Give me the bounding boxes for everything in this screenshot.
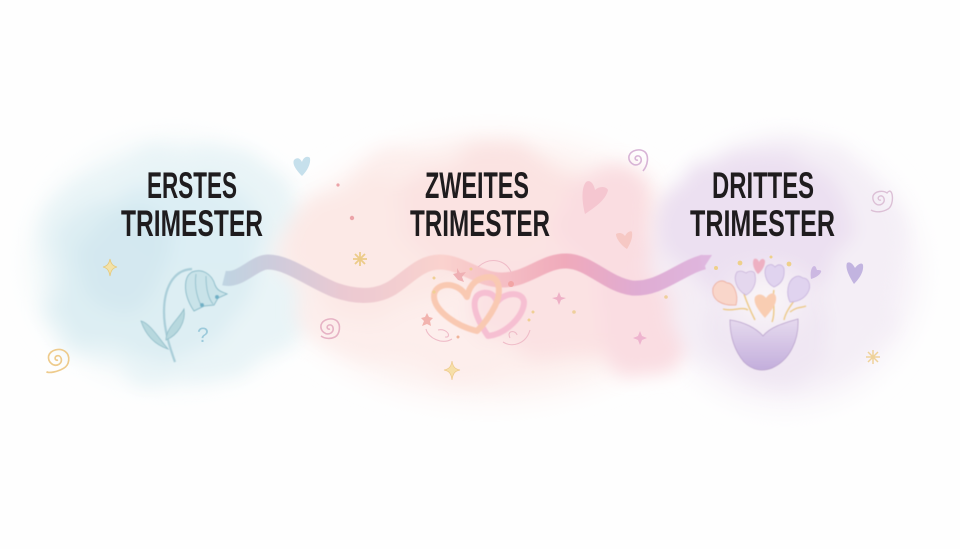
icon: bell flower with leaves <box>141 269 227 362</box>
heading: Zweites Trimester: ZWEITES <box>425 165 529 206</box>
heading: Zweites Trimester <box>410 165 550 244</box>
lilac tulip left <box>735 271 755 295</box>
heading: Erstes Trimester <box>121 165 263 244</box>
icon: pink sparkle right of hearts <box>552 292 566 305</box>
icon: gold sparkle bottom <box>444 361 460 380</box>
heading: Erstes Trimester: TRIMESTER <box>121 203 263 244</box>
pink heart <box>753 259 765 274</box>
icon: gold dots around bouquet <box>714 256 791 270</box>
icon: purple heart <box>846 262 863 284</box>
peach heart <box>755 293 776 318</box>
peach tulip <box>713 281 737 305</box>
heading: Drittes Trimester <box>690 165 835 244</box>
stems <box>723 290 806 322</box>
icon: gold spiral <box>46 349 69 372</box>
lilac tulip right <box>788 276 810 302</box>
heading: Zweites Trimester: TRIMESTER <box>410 203 550 244</box>
icon: swirls around the hearts <box>426 261 530 345</box>
heading: Drittes Trimester: DRITTES <box>712 165 814 206</box>
background wash: pale halo across the band <box>35 140 915 402</box>
icon: small lilac heart <box>811 266 821 279</box>
icon: pink sparkle <box>633 331 647 345</box>
icon: pink spiral lower left <box>321 319 339 338</box>
lilac cup <box>730 319 798 370</box>
background wash: purple <box>658 140 902 385</box>
background wash: pink <box>280 150 692 380</box>
icon: gold asterisk right <box>866 350 880 364</box>
wavy ribbon connecting the trimesters <box>224 255 712 295</box>
icon: sparkles around the hearts <box>421 268 534 338</box>
icon: small pink dots <box>336 183 354 220</box>
lilac tulip centre <box>765 264 784 287</box>
icon: gold asterisk star <box>353 252 367 266</box>
icon: large pink heart <box>582 181 608 214</box>
background wash: blue <box>35 144 325 380</box>
icon: blue heart <box>293 157 310 176</box>
icon: gold sparkle left <box>103 259 117 276</box>
pale glow behind bouquet <box>729 276 801 324</box>
icon: question mark: ? <box>197 324 209 347</box>
icon: pastel spiral right <box>871 191 892 212</box>
icon: interlinked hearts <box>434 277 524 336</box>
icon: small peach heart <box>616 231 632 249</box>
heading: Erstes Trimester: ERSTES <box>147 165 237 206</box>
icon: mauve spiral <box>629 150 647 171</box>
icon: small gold dots <box>572 295 668 314</box>
icon: bouquet in a lilac cup <box>713 259 810 370</box>
heading: Drittes Trimester: TRIMESTER <box>690 203 835 244</box>
